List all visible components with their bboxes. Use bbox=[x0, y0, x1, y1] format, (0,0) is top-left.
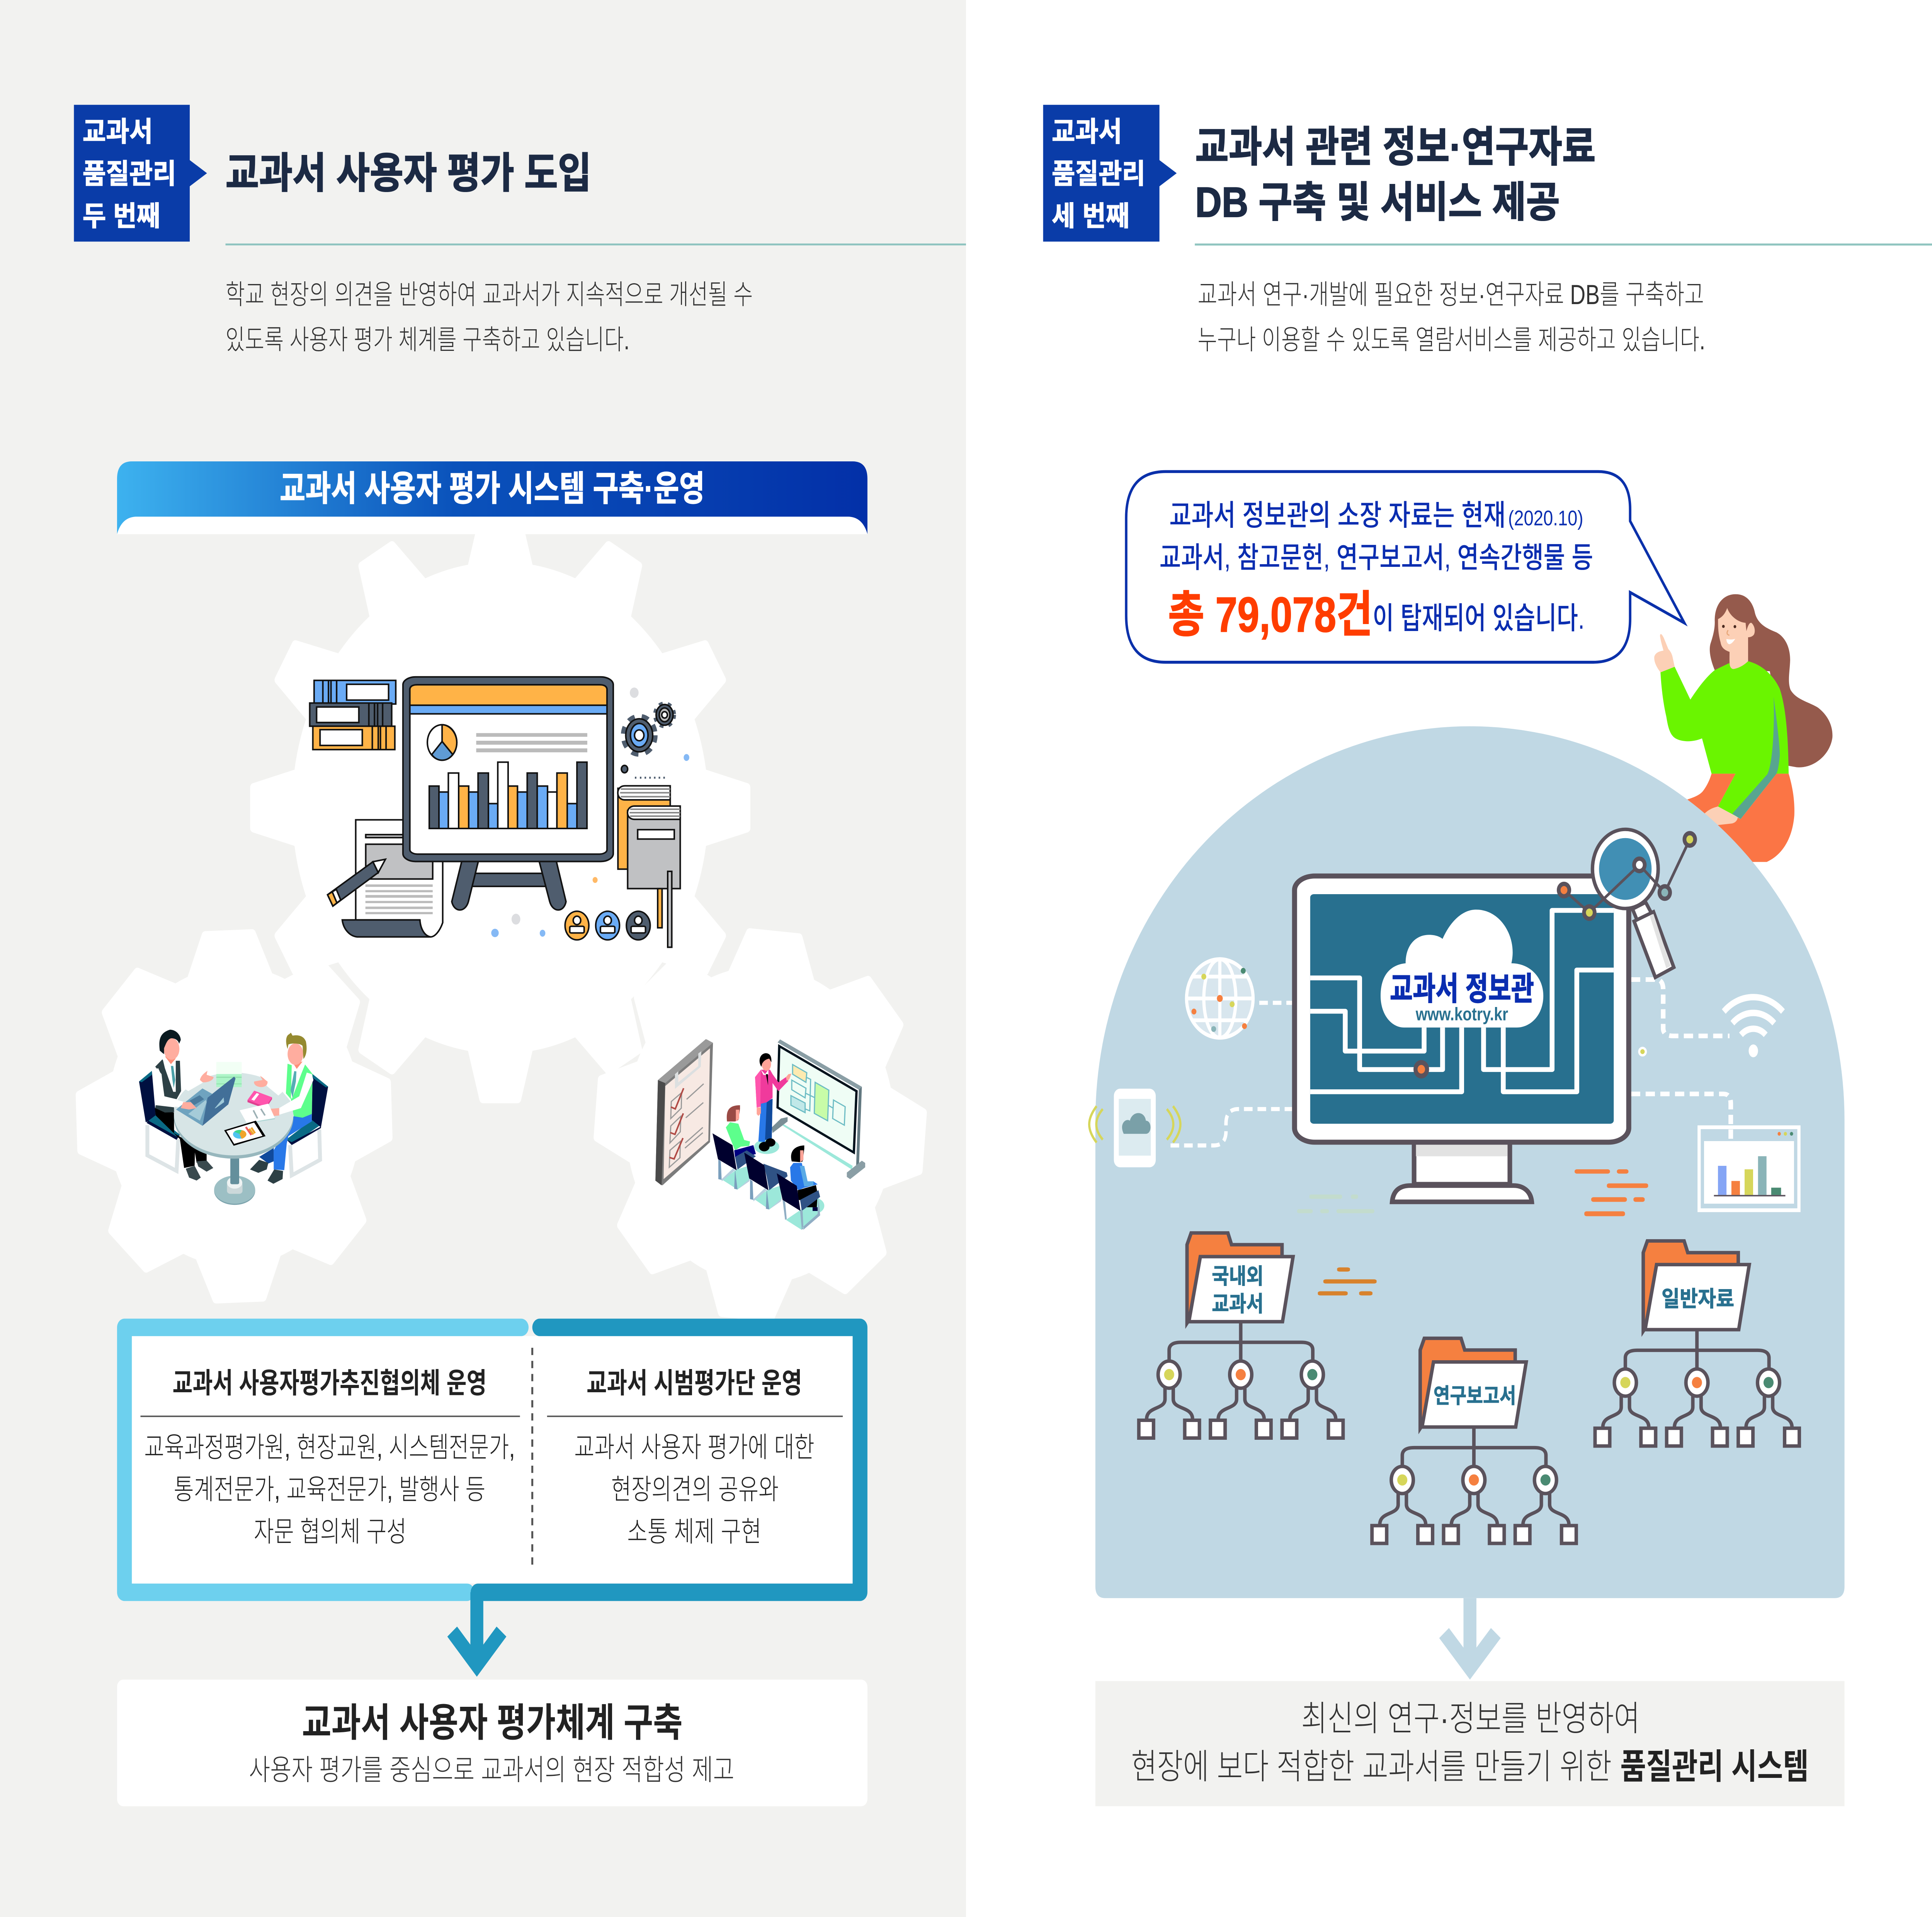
gear: left white bbox=[75, 928, 393, 1305]
right column text: 교과서 시범평가단 운영 bbox=[587, 1368, 802, 1399]
description bbox=[226, 280, 753, 356]
evaluation process box bbox=[124, 1327, 860, 1592]
man left upper body bbox=[152, 1030, 214, 1112]
trend line nodes bbox=[1557, 831, 1697, 921]
cloud label text: 교과서 정보관 bbox=[1390, 971, 1534, 1007]
result box bbox=[117, 1680, 867, 1806]
gear: large white bbox=[254, 517, 747, 1099]
speech bubble: 교과서 정보관의 소장 자료는 현재 bbox=[1169, 499, 1506, 532]
left column text: 교과서 사용자평가추진협의체 운영 bbox=[172, 1368, 487, 1399]
orange node bbox=[1413, 1060, 1429, 1078]
circuit lines bbox=[1310, 910, 1614, 1092]
men's legs bbox=[155, 1108, 312, 1184]
heading: 교과서 관련 정보·연구자료 bbox=[1195, 124, 1595, 171]
round table bbox=[172, 1071, 297, 1158]
dashed connectors bbox=[1631, 980, 1731, 1140]
magnifier bbox=[1592, 829, 1674, 977]
folder labels: 연구보고서 bbox=[1434, 1384, 1516, 1408]
header tag: third bbox=[1043, 105, 1177, 242]
table pedestal bbox=[214, 1158, 255, 1205]
arrow down bbox=[452, 1592, 502, 1665]
laptop bbox=[176, 1077, 235, 1126]
heading: DB 구축 및 서비스 제공 bbox=[1195, 179, 1560, 226]
left column text: 교육과정평가원, 현장교원, 시스템전문가, bbox=[144, 1432, 515, 1463]
bar chart bbox=[429, 762, 587, 828]
hand on lap bbox=[1704, 806, 1738, 825]
folder tree: general materials bbox=[1595, 1241, 1799, 1446]
cloud label text bbox=[1390, 971, 1534, 1024]
arrow down pale bbox=[1444, 1598, 1496, 1668]
speech bubble: (2020.10) bbox=[1508, 506, 1583, 530]
cloud label text: www.kotry.kr bbox=[1415, 1004, 1508, 1024]
icon: book stack bbox=[310, 680, 396, 750]
dome background bbox=[1095, 726, 1845, 1598]
seated person two (empty chair) bbox=[744, 1153, 787, 1209]
conclusion box bbox=[1095, 1681, 1845, 1806]
face bbox=[1718, 608, 1755, 669]
folder tree: domestic and foreign textbooks bbox=[1139, 1233, 1343, 1438]
conclusion box: 최신의 연구·정보를 반영하여 bbox=[1301, 1699, 1640, 1738]
decorative dots bbox=[491, 687, 689, 937]
heading bbox=[1195, 124, 1932, 245]
orange dashes bbox=[1575, 1169, 1648, 1216]
monitor frame bbox=[1294, 876, 1629, 1142]
description: 있도록 사용자 평가 체계를 구축하고 있습니다. bbox=[226, 325, 629, 356]
small node bbox=[1638, 1047, 1647, 1056]
pointing hand bbox=[1654, 634, 1675, 672]
pink book bbox=[248, 1090, 272, 1109]
illustration: evaluation group with whiteboard bbox=[655, 1039, 865, 1230]
green sweater bbox=[1660, 661, 1789, 819]
header tag: third: 품질관리 bbox=[1052, 159, 1145, 190]
speech bubble bbox=[1126, 471, 1684, 662]
right column text: 소통 체제 구현 bbox=[627, 1516, 762, 1548]
banner bbox=[117, 461, 867, 534]
description bbox=[1197, 280, 1705, 356]
folder labels: 일반자료 bbox=[1662, 1287, 1734, 1311]
speech bubble: 총 79,078건 bbox=[1168, 587, 1372, 643]
panel: textbook user evaluation bbox=[74, 105, 966, 1806]
panel: left background bbox=[0, 0, 966, 1917]
right column text: 교과서 사용자 평가에 대한 bbox=[574, 1432, 815, 1463]
illustration: main monitor bbox=[1294, 829, 1731, 1216]
heading: 교과서 사용자 평가 도입 bbox=[226, 150, 592, 197]
icon: paper scroll bbox=[342, 820, 443, 937]
left column text: 자문 협의체 구성 bbox=[254, 1516, 406, 1548]
monitor stand bbox=[1392, 1141, 1532, 1202]
icon: pencil bbox=[328, 859, 386, 906]
tablet bbox=[224, 1121, 265, 1146]
box border light bbox=[124, 1327, 521, 1592]
conclusion box: 품질관리 시스템 bbox=[1620, 1747, 1809, 1786]
skirt bbox=[1686, 774, 1794, 862]
header tag: second bbox=[74, 105, 207, 242]
cloud bbox=[1381, 910, 1543, 1027]
right chair bbox=[287, 1074, 328, 1175]
orange dashes by folder bbox=[1318, 1267, 1377, 1296]
speech bubble: 이 탑재되어 있습니다. bbox=[1372, 601, 1585, 635]
hair bbox=[1710, 594, 1832, 767]
icon: globe bbox=[1187, 959, 1253, 1038]
icon: mobile phone bbox=[1089, 1003, 1296, 1167]
clipboard checklist bbox=[655, 1039, 713, 1186]
presenter bbox=[754, 1053, 791, 1154]
header tag: third: 교과서 bbox=[1052, 117, 1122, 148]
header tag: second: 두 번째 bbox=[83, 201, 160, 232]
sleeve shadow bbox=[1732, 697, 1780, 819]
seated person one bbox=[713, 1105, 756, 1189]
illustration: woman pointing bbox=[1654, 594, 1832, 862]
description: 교과서 연구·개발에 필요한 정보·연구자료 DB를 구축하고 bbox=[1197, 280, 1704, 310]
pale green dashes bbox=[1297, 1194, 1374, 1213]
icon: gears bbox=[624, 703, 674, 754]
icon: chart window bbox=[1699, 1127, 1799, 1210]
screen bbox=[1310, 894, 1614, 1124]
icon: easel stand bbox=[452, 860, 566, 910]
illustration: meeting at round table bbox=[139, 1030, 328, 1205]
conclusion box: 현장에 보다 적합한 교과서를 만들기 위한 bbox=[1131, 1747, 1612, 1786]
icon: user avatars bbox=[565, 911, 650, 940]
icon: stacked books right bbox=[618, 786, 680, 947]
whiteboard bbox=[772, 1039, 865, 1179]
left column text: 통계전문가, 교육전문가, 발행사 등 bbox=[174, 1474, 485, 1505]
result box: 교과서 사용자 평가체계 구축 bbox=[302, 1701, 683, 1745]
green document bbox=[216, 1062, 242, 1087]
speech bubble: 교과서, 참고문헌, 연구보고서, 연속간행물 등 bbox=[1160, 541, 1593, 574]
description: 학교 현장의 의견을 반영하여 교과서가 지속적으로 개선될 수 bbox=[226, 280, 753, 310]
box border dark bbox=[478, 1327, 860, 1592]
right column text bbox=[547, 1368, 843, 1548]
panel: information database bbox=[1043, 105, 1932, 1806]
left chair bbox=[139, 1071, 180, 1171]
header tag: second: 품질관리 bbox=[83, 159, 176, 190]
right column text: 현장의견의 공유와 bbox=[611, 1474, 779, 1505]
result box: 사용자 평가를 중심으로 교과서의 현장 적합성 제고 bbox=[249, 1754, 735, 1786]
folder labels: 교과서 bbox=[1212, 1292, 1264, 1317]
header tag: third: 세 번째 bbox=[1052, 201, 1129, 232]
gear: right white bbox=[585, 919, 935, 1332]
icon: wifi bbox=[1724, 997, 1783, 1057]
folder labels: 국내외 bbox=[1212, 1264, 1264, 1289]
banner: 교과서 사용자 평가 시스템 구축·운영 bbox=[280, 469, 705, 508]
icon: presentation monitor bbox=[403, 677, 613, 861]
left column text bbox=[141, 1368, 520, 1548]
man right upper body bbox=[254, 1032, 313, 1118]
description: 누구나 이용할 수 있도록 열람서비스를 제공하고 있습니다. bbox=[1197, 325, 1705, 356]
folder trees bbox=[1139, 1233, 1799, 1543]
seated person three bbox=[777, 1145, 824, 1230]
folder tree: research reports bbox=[1372, 1338, 1576, 1543]
paper on table bbox=[240, 1104, 275, 1124]
illustration: presentation board and documents bbox=[310, 677, 689, 947]
header tag: second: 교과서 bbox=[83, 117, 153, 148]
folder labels bbox=[1212, 1264, 1734, 1408]
